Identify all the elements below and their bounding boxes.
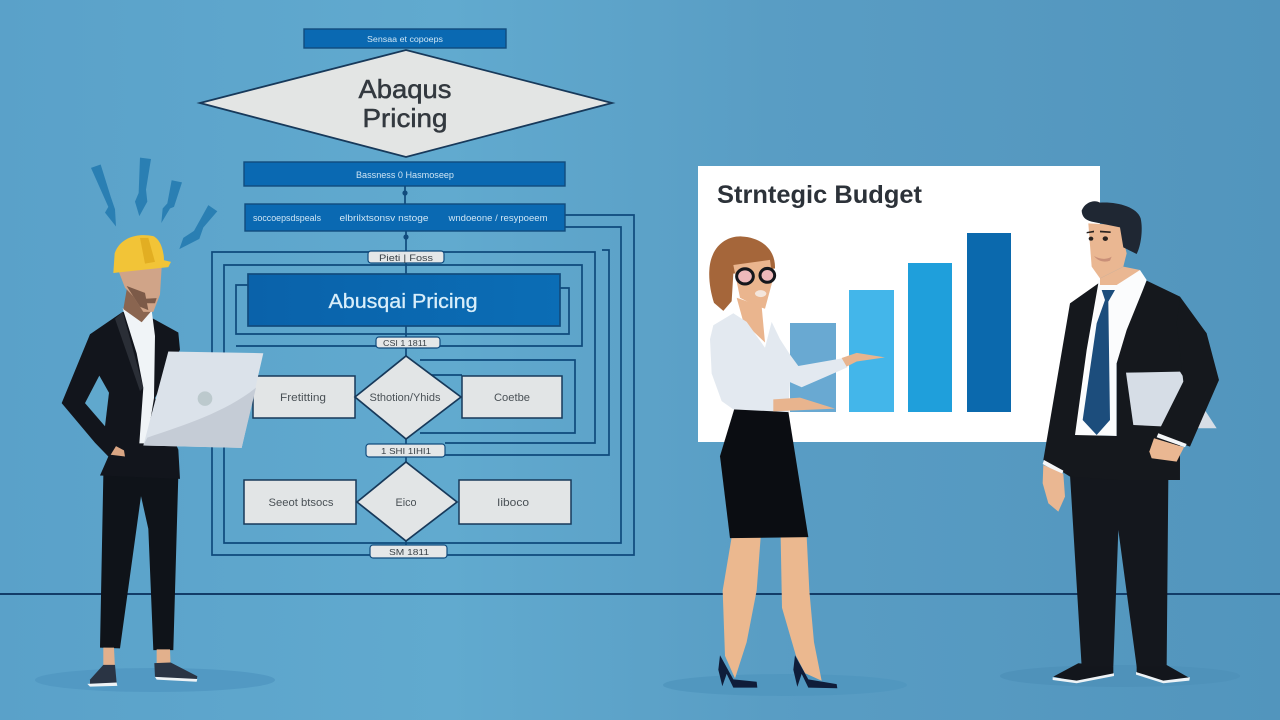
- woman mouth: [755, 290, 766, 297]
- pill label 4: SM 1811: [389, 548, 430, 557]
- third blue bar with three labels: elbrilxtsonsv nstoge: [340, 213, 428, 223]
- businessman with folder: [1043, 201, 1219, 683]
- woman legs: [723, 536, 822, 681]
- presenter woman: [709, 236, 885, 688]
- stress bolts above worker: [91, 158, 217, 249]
- worker ankles: [103, 648, 171, 668]
- decision diamond: Sthotion: Sthotion/Yhids: [370, 392, 441, 404]
- worker shirt: [123, 308, 155, 443]
- presentation board: [698, 166, 1100, 442]
- top header bar: Sensaa et copoeps: [367, 35, 443, 44]
- man trousers: [1070, 475, 1168, 667]
- woman hair: [709, 236, 775, 311]
- man cuffs: [1043, 433, 1187, 475]
- woman blouse: [710, 313, 847, 412]
- main blue bar: Abusqai Pricing: [248, 274, 560, 326]
- pill label 3: [366, 444, 445, 457]
- process box: Seeot btsocs: [244, 480, 356, 524]
- woman glasses: [737, 268, 775, 284]
- man tie: [1083, 290, 1115, 435]
- decision diamond: Abaqus Pricing: [200, 50, 612, 157]
- process box: Fretitting: Fretitting: [280, 392, 326, 404]
- bar chart: [790, 233, 1011, 412]
- worker lapel: [115, 312, 143, 391]
- board title: Strntegic Budget: [717, 181, 923, 209]
- pill label 1: Pieti | Foss: [379, 253, 434, 263]
- folder under arm: [1126, 372, 1217, 428]
- third blue bar with three labels: wndoeone / resypoeem: [447, 213, 548, 223]
- main blue bar: Abusqai Pricing: Abusqai Pricing: [328, 291, 478, 313]
- woman neck: [737, 298, 765, 343]
- woman heels: [718, 655, 837, 688]
- decision diamond: Abaqus Pricing: Abaqus: [358, 74, 452, 104]
- worker with hard hat and laptop: [62, 235, 263, 687]
- connector dots: [402, 190, 409, 240]
- worker face: [118, 267, 162, 312]
- worker shoes: [87, 662, 197, 687]
- process box: Seeot btsocs: Seeot btsocs: [268, 497, 334, 509]
- decision diamond: Sthotion: [355, 356, 461, 439]
- gap between arm and body: [85, 376, 109, 426]
- pill label 3: 1 SHI 1IHI1: [381, 447, 432, 456]
- worker jacket: [62, 312, 180, 479]
- man neck: [1100, 267, 1140, 285]
- hard hat ridge: [140, 238, 155, 264]
- second blue bar: Bassness 0 Hasmoseep: [356, 170, 454, 180]
- man sleeve: [1157, 300, 1219, 447]
- floor line: [0, 593, 1280, 595]
- process box: Fretitting: [253, 376, 355, 418]
- floor shadows: [35, 665, 1240, 696]
- worker hand in pocket: [111, 446, 125, 457]
- worker facial shading: [127, 286, 157, 310]
- decision diamond: Eico: Eico: [396, 497, 416, 509]
- process box: Coetbe: [462, 376, 562, 418]
- third blue bar with three labels: [245, 204, 565, 231]
- man shoes: [1053, 663, 1190, 683]
- man hair: [1082, 201, 1142, 254]
- process box: Iiboco: [459, 480, 571, 524]
- second blue bar: [244, 162, 565, 186]
- man eyes and brows: [1087, 231, 1111, 241]
- woman face: [733, 260, 773, 309]
- worker neck: [123, 286, 152, 322]
- board panel: [698, 166, 1100, 442]
- connector lines: [212, 186, 634, 555]
- laptop: [143, 351, 263, 448]
- decision diamond: Eico: [357, 462, 457, 541]
- process box: Iiboco: Iiboco: [497, 497, 529, 509]
- pill label 2: CSI 1 1811: [383, 339, 428, 348]
- hard hat: [113, 235, 171, 273]
- man jacket: [1043, 281, 1207, 480]
- third blue bar with three labels: soccoepsdspeals: [253, 213, 321, 223]
- pill label 1: [368, 251, 444, 263]
- flowchart: [200, 29, 634, 558]
- pill label 2: [376, 337, 440, 348]
- woman skirt: [720, 407, 808, 538]
- man mouth: [1094, 256, 1112, 262]
- decision diamond: Abaqus Pricing: Pricing: [362, 103, 448, 133]
- man shirt: [1075, 270, 1147, 436]
- worker trousers: [100, 475, 178, 650]
- process box: Coetbe: Coetbe: [494, 392, 530, 404]
- man face: [1088, 223, 1127, 278]
- woman hands: [773, 353, 885, 411]
- man hands: [1043, 438, 1184, 512]
- top header bar: [304, 29, 506, 48]
- pill label 4: [370, 545, 447, 558]
